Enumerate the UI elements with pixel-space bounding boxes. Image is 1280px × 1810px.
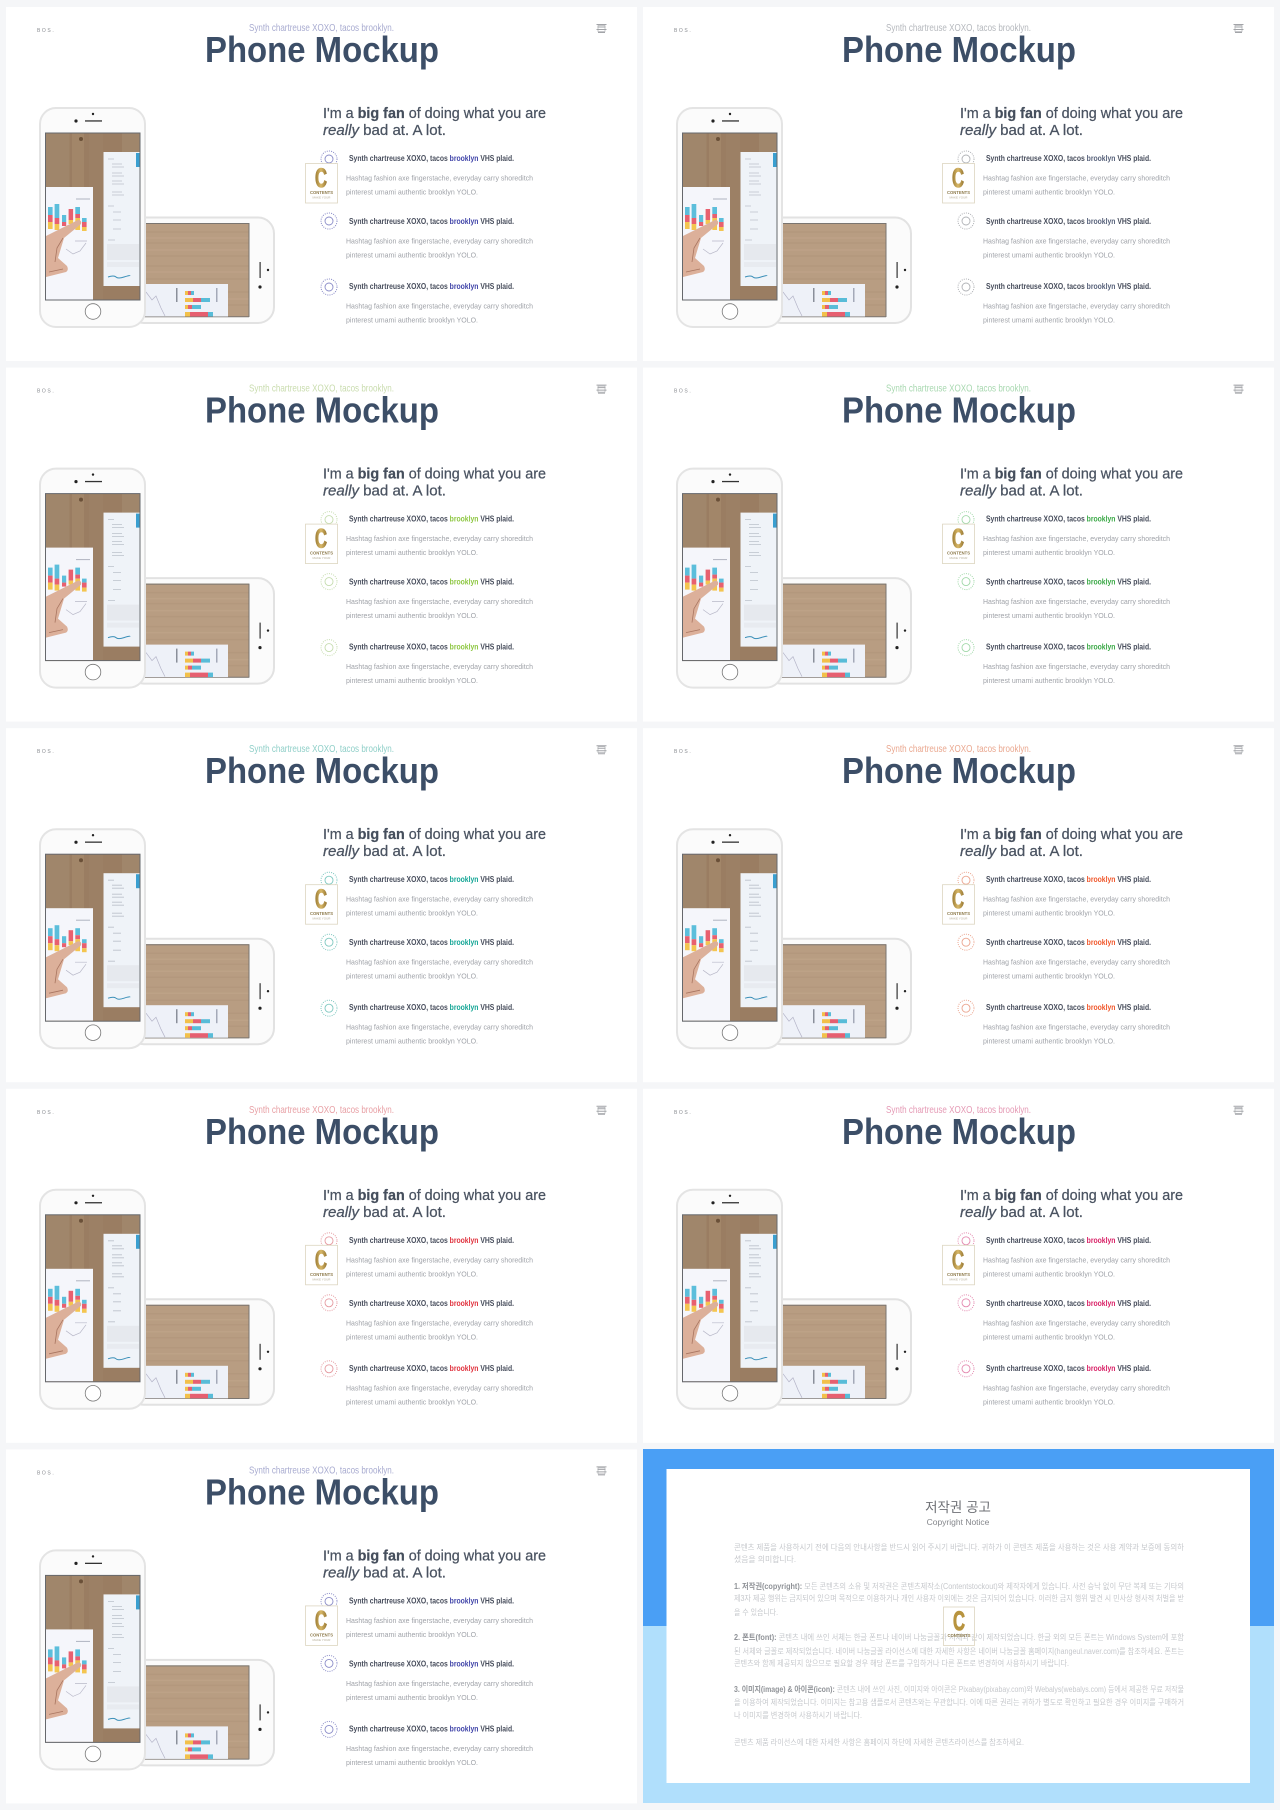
icon: menu [596,24,606,32]
list item 1: pinterest umami authentic brooklyn YOLO. [346,1269,478,1278]
list item 2: pinterest umami authentic brooklyn YOLO. [983,1332,1115,1341]
panel: phone mockup slide 4 [643,368,1274,722]
icon: phones [40,1550,274,1769]
heading [323,105,546,139]
watermark: C [315,524,327,554]
list item 2: pinterest umami authentic brooklyn YOLO. [983,972,1115,981]
watermark: CONTENTS [310,190,333,195]
list item 1: pinterest umami authentic brooklyn YOLO. [346,1630,478,1639]
page tag: BOS. [37,389,55,395]
list item 2: Hashtag fashion axe fingerstache, everyday carry shoreditch [346,1679,533,1688]
list item 2: pinterest umami authentic brooklyn YOLO. [346,972,478,981]
list item 2: Hashtag fashion axe fingerstache, everyday carry shoreditch [983,958,1170,967]
panel: phone mockup slide 8 [643,1089,1274,1443]
title: Phone Mockup [205,29,439,70]
list item 1 [321,1233,533,1278]
page tag: BOS. [674,28,692,34]
list item 3: pinterest umami authentic brooklyn YOLO. [346,1037,478,1046]
list item 2: Synth chartreuse XOXO, tacos brooklyn VHS plaid. [986,578,1151,587]
list item 1: pinterest umami authentic brooklyn YOLO. [346,909,478,918]
list item 3 [321,279,533,324]
watermark: C [952,1245,964,1275]
watermark: C [952,524,964,554]
watermark: MAKE YOUR [950,1277,968,1281]
icon: menu [596,385,606,393]
section 1: copyright: 1. 저작권(copyright): 모든 콘텐츠의 소유 및 저작권은 콘텐츠제작소(Contentstockout)와 제작자에게 있습니다. 사전 승낙 없이 무단 복제 또는 기타의 [734,1581,1184,1591]
list item 3: Synth chartreuse XOXO, tacos brooklyn VHS plaid. [349,282,514,291]
watermark [306,524,338,564]
list item 1: Synth chartreuse XOXO, tacos brooklyn VHS plaid. [349,154,514,163]
page tag: BOS. [37,749,55,755]
watermark: CONTENTS [310,551,333,556]
list item 1 [958,1233,1170,1278]
watermark: MAKE YOUR [950,917,968,921]
list item 2 [321,1295,533,1341]
heading: I'm a big fan of doing what you are [323,466,546,483]
watermark [306,1245,338,1285]
list item 2: Hashtag fashion axe fingerstache, everyday carry shoreditch [983,236,1170,246]
list item 1: pinterest umami authentic brooklyn YOLO. [983,548,1115,557]
icon: phones [40,1190,274,1409]
heading: really bad at. A lot. [960,122,1083,139]
list item 3: pinterest umami authentic brooklyn YOLO. [983,316,1115,324]
icon: phones [40,829,274,1048]
list item 3 [321,640,533,685]
watermark: C [315,1605,327,1635]
watermark [944,1606,974,1646]
list item 1 [321,151,533,196]
title: Phone Mockup [205,1471,439,1512]
watermark: MAKE YOUR [313,196,331,200]
watermark: CONTENTS [947,190,970,195]
list item 3: Synth chartreuse XOXO, tacos brooklyn VHS plaid. [986,1003,1151,1012]
copyright heading: 저작권 공고 [925,1500,991,1515]
section 1: copyright: 제3자 제공 행위는 금지되어 있으며 목적으로 이용하거나 개인 사용자 이외에는 것은 금지되어 있습니다. 이러한 금지 행위 발견 시 민사상 형사적 처벌을 받 [734,1593,1185,1603]
list item 2 [321,1655,533,1702]
list item 1: Hashtag fashion axe fingerstache, everyday carry shoreditch [346,1255,533,1264]
heading [960,105,1183,139]
list item 2: Synth chartreuse XOXO, tacos brooklyn VHS plaid. [986,1299,1151,1308]
icon: menu [1234,24,1244,32]
watermark [306,884,338,924]
list item 2: Synth chartreuse XOXO, tacos brooklyn VHS plaid. [349,578,514,587]
list item 1: pinterest umami authentic brooklyn YOLO. [983,188,1115,196]
list item 3: Synth chartreuse XOXO, tacos brooklyn VHS plaid. [349,643,514,652]
list item 3: Hashtag fashion axe fingerstache, everyday carry shoreditch [346,1383,533,1392]
list item 2: Synth chartreuse XOXO, tacos brooklyn VHS plaid. [349,1299,514,1308]
watermark [306,1605,338,1645]
list item 3: Hashtag fashion axe fingerstache, everyday carry shoreditch [346,1744,533,1753]
watermark [942,1245,974,1285]
list item 3: Synth chartreuse XOXO, tacos brooklyn VHS plaid. [986,282,1151,291]
watermark: CONTENTS [310,1272,333,1277]
watermark: CONTENTS [947,551,970,556]
heading: really bad at. A lot. [323,122,446,139]
icon: phones [677,469,911,688]
list item 3 [321,1000,533,1046]
section 2: font: 콘텐츠와 함께 제공되지 않으므로 필요할 경우 해당 폰트를 구입하거나 다른 폰트로 변경하여 사용하시기 바랍니다. [734,1658,1069,1668]
panel: phone mockup slide 3 [6,368,637,722]
panel: phone mockup slide 9 [6,1449,637,1803]
heading: I'm a big fan of doing what you are [323,1547,546,1564]
panel: phone mockup slide 2 [643,7,1274,361]
list item 2 [958,1295,1170,1341]
icon: menu [1234,746,1244,754]
subtitle: Synth chartreuse XOXO, tacos brooklyn. [249,1104,394,1116]
intro paragraph: 콘텐츠 제품을 사용하시기 전에 다음의 안내사항을 반드시 읽어 주시기 바랍니다. 귀하가 이 콘텐츠 제품을 사용하는 것은 사용 계약과 보증에 동의하 [734,1542,1185,1552]
icon: menu [596,746,606,754]
list item 3: pinterest umami authentic brooklyn YOLO. [346,676,478,685]
list item 1: Synth chartreuse XOXO, tacos brooklyn VHS plaid. [349,1236,514,1245]
list item 1 [958,512,1170,557]
icon: menu [596,1467,606,1475]
list item 2: Hashtag fashion axe fingerstache, everyday carry shoreditch [346,597,533,606]
heading: I'm a big fan of doing what you are [323,105,546,122]
list item 3: pinterest umami authentic brooklyn YOLO. [346,1397,478,1406]
watermark [942,524,974,564]
watermark: MAKE YOUR [313,1277,331,1281]
page tag: BOS. [674,749,692,755]
list item 2: Hashtag fashion axe fingerstache, everyday carry shoreditch [346,958,533,967]
list item 3: pinterest umami authentic brooklyn YOLO. [346,1758,478,1767]
watermark: CONTENTS [947,911,970,916]
list item 1: pinterest umami authentic brooklyn YOLO. [346,548,478,557]
list item 1: Hashtag fashion axe fingerstache, everyday carry shoreditch [346,1616,533,1625]
list item 3: Hashtag fashion axe fingerstache, everyday carry shoreditch [983,662,1170,671]
list item 3: Hashtag fashion axe fingerstache, everyday carry shoreditch [346,302,533,310]
section 3: image and icon [734,1684,1184,1720]
list item 3: Synth chartreuse XOXO, tacos brooklyn VHS plaid. [349,1724,514,1733]
panel: phone mockup slide 5 [6,728,637,1082]
intro paragraph [734,1542,1185,1564]
list item 2 [321,213,533,260]
list item 1: pinterest umami authentic brooklyn YOLO. [983,909,1115,918]
watermark: C [953,1606,965,1636]
icon: menu [596,1106,606,1114]
heading: I'm a big fan of doing what you are [323,826,546,843]
section 3: image and icon: 3. 이미지(image) & 아이콘(icon): 콘텐츠 내에 쓰인 사진, 이미지와 아이콘은 Pixabay(pixabay.com)와 Webalys(webalys.com) 등에서 제공한 무료 저작물 [734,1684,1184,1694]
watermark: CONTENTS [947,1272,970,1277]
watermark: C [315,1245,327,1275]
heading: I'm a big fan of doing what you are [960,105,1183,122]
list item 1: Synth chartreuse XOXO, tacos brooklyn VHS plaid. [986,1236,1151,1245]
list item 2: Synth chartreuse XOXO, tacos brooklyn VHS plaid. [986,217,1151,226]
list item 3: Hashtag fashion axe fingerstache, everyday carry shoreditch [346,662,533,671]
list item 1: Hashtag fashion axe fingerstache, everyday carry shoreditch [983,895,1170,904]
watermark: C [315,884,327,914]
watermark: MAKE YOUR [950,556,968,560]
panel: phone mockup slide 6 [643,728,1274,1082]
subtitle: Synth chartreuse XOXO, tacos brooklyn. [886,383,1031,395]
list item 2: pinterest umami authentic brooklyn YOLO. [346,611,478,620]
list item 2: Hashtag fashion axe fingerstache, everyday carry shoreditch [346,1318,533,1327]
intro paragraph: 셨음을 의미합니다. [734,1554,796,1564]
section 3: image and icon: 나 이미지를 변경하여 사용하시기 바랍니다. [734,1710,862,1720]
list item 2: pinterest umami authentic brooklyn YOLO. [983,250,1115,260]
list item 3 [321,1361,533,1406]
list item 1: Hashtag fashion axe fingerstache, everyday carry shoreditch [983,174,1170,182]
heading [323,1187,546,1221]
subtitle: Synth chartreuse XOXO, tacos brooklyn. [249,22,394,34]
list item 1 [958,872,1170,918]
list item 3: Hashtag fashion axe fingerstache, everyday carry shoreditch [983,1023,1170,1032]
title: Phone Mockup [205,750,439,791]
list item 2 [321,574,533,620]
heading [323,466,546,500]
watermark: MAKE YOUR [313,556,331,560]
section 2: font: 된 서체와 글꼴로 제작되었습니다. 네이버 나눔글꼴 라이선스에 대한 자세한 사항은 네이버 나눔글꼴 홈페이지(hangeul.naver.com)를 참조하세요. 폰트는 [734,1646,1184,1656]
heading [960,1187,1183,1221]
list item 3 [958,1361,1170,1406]
list item 3: pinterest umami authentic brooklyn YOLO. [983,1037,1115,1046]
list item 1: Synth chartreuse XOXO, tacos brooklyn VHS plaid. [349,515,514,524]
watermark: CONTENTS [947,1633,971,1638]
icon: menu [1234,385,1244,393]
page tag: BOS. [674,389,692,395]
list item 3: Hashtag fashion axe fingerstache, everyday carry shoreditch [983,302,1170,310]
heading [960,466,1183,500]
closing line: 콘텐츠 제품 라이선스에 대한 자세한 사항은 홈페이지 하단에 자세한 콘텐츠라이선스를 참조하세요. [734,1737,1024,1747]
list item 2 [321,934,533,981]
icon: phones [677,108,911,327]
list item 1: Hashtag fashion axe fingerstache, everyday carry shoreditch [346,534,533,543]
subtitle: Synth chartreuse XOXO, tacos brooklyn. [886,743,1031,755]
list item 1: Synth chartreuse XOXO, tacos brooklyn VHS plaid. [986,515,1151,524]
panel: phone mockup slide 7 [6,1089,637,1443]
page tag: BOS. [37,28,55,34]
section 1: copyright [734,1581,1185,1617]
list item 1: Synth chartreuse XOXO, tacos brooklyn VHS plaid. [986,154,1151,163]
heading: I'm a big fan of doing what you are [960,826,1183,843]
list item 2: pinterest umami authentic brooklyn YOLO. [346,1332,478,1341]
watermark [942,163,974,203]
list item 2: Hashtag fashion axe fingerstache, everyday carry shoreditch [346,236,533,246]
list item 1: Synth chartreuse XOXO, tacos brooklyn VHS plaid. [349,1596,514,1605]
watermark: C [952,884,964,914]
list item 1: pinterest umami authentic brooklyn YOLO. [983,1269,1115,1278]
list item 1 [321,512,533,557]
watermark: CONTENTS [310,1632,333,1637]
page tag: BOS. [37,1110,55,1116]
list item 1: Synth chartreuse XOXO, tacos brooklyn VHS plaid. [986,875,1151,884]
heading: really bad at. A lot. [960,1204,1083,1221]
subtitle: Synth chartreuse XOXO, tacos brooklyn. [886,1104,1031,1116]
list item 1: Synth chartreuse XOXO, tacos brooklyn VHS plaid. [349,875,514,884]
section 2: font: 2. 폰트(font): 콘텐츠 내에 쓰인 서체는 한글 폰트나 네이버 나눔글꼴과 서체와 같이 제작되었습니다. 한글 외의 모든 폰트는 Windows System에 포함 [734,1632,1185,1642]
section 2: font [734,1632,1185,1668]
title: Phone Mockup [842,29,1076,70]
list item 3: Synth chartreuse XOXO, tacos brooklyn VHS plaid. [349,1003,514,1012]
list item 1: Hashtag fashion axe fingerstache, everyday carry shoreditch [983,534,1170,543]
heading [960,826,1183,860]
list item 3: pinterest umami authentic brooklyn YOLO. [983,1397,1115,1406]
page tag: BOS. [37,1470,55,1476]
title: Phone Mockup [205,1111,439,1152]
page tag: BOS. [674,1110,692,1116]
list item 2: Hashtag fashion axe fingerstache, everyday carry shoreditch [983,597,1170,606]
list item 2: Hashtag fashion axe fingerstache, everyday carry shoreditch [983,1318,1170,1327]
heading [323,1547,546,1581]
watermark: MAKE YOUR [313,1638,331,1642]
heading: really bad at. A lot. [323,483,446,500]
watermark: MAKE YOUR [950,196,968,200]
watermark [306,163,338,203]
watermark [942,884,974,924]
watermark: MAKE YOUR [313,917,331,921]
heading: I'm a big fan of doing what you are [960,1187,1183,1204]
watermark: C [952,163,964,193]
list item 1: pinterest umami authentic brooklyn YOLO. [346,188,478,196]
list item 3: Hashtag fashion axe fingerstache, everyday carry shoreditch [346,1023,533,1032]
copyright subheading: Copyright Notice [927,1517,990,1527]
list item 2 [958,934,1170,981]
heading: really bad at. A lot. [323,843,446,860]
heading: really bad at. A lot. [323,1564,446,1581]
list item 2 [958,213,1170,260]
list item 2 [958,574,1170,620]
list item 3: Synth chartreuse XOXO, tacos brooklyn VHS plaid. [349,1364,514,1373]
heading: I'm a big fan of doing what you are [323,1187,546,1204]
section 1: copyright: 을 수 있습니다. [734,1607,778,1617]
heading: really bad at. A lot. [960,483,1083,500]
list item 1 [958,151,1170,196]
list item 1: Hashtag fashion axe fingerstache, everyday carry shoreditch [346,895,533,904]
icon: phones [40,108,274,327]
watermark: CONTENTS [310,911,333,916]
subtitle: Synth chartreuse XOXO, tacos brooklyn. [249,743,394,755]
list item 3 [958,1000,1170,1046]
title: Phone Mockup [842,390,1076,431]
list item 3 [958,279,1170,324]
list item 1 [321,872,533,918]
list item 3: Synth chartreuse XOXO, tacos brooklyn VHS plaid. [986,1364,1151,1373]
title: Phone Mockup [842,1111,1076,1152]
watermark: C [315,163,327,193]
heading [323,826,546,860]
subtitle: Synth chartreuse XOXO, tacos brooklyn. [886,22,1031,34]
icon: menu [1234,1106,1244,1114]
heading: really bad at. A lot. [960,843,1083,860]
list item 3 [321,1721,533,1767]
list item 3: pinterest umami authentic brooklyn YOLO. [346,316,478,324]
list item 3: Synth chartreuse XOXO, tacos brooklyn VHS plaid. [986,643,1151,652]
list item 2: pinterest umami authentic brooklyn YOLO. [346,1693,478,1702]
list item 2: pinterest umami authentic brooklyn YOLO. [346,250,478,260]
list item 1: Hashtag fashion axe fingerstache, everyday carry shoreditch [983,1255,1170,1264]
list item 2: Synth chartreuse XOXO, tacos brooklyn VHS plaid. [349,938,514,947]
list item 3: Hashtag fashion axe fingerstache, everyday carry shoreditch [983,1383,1170,1392]
list item 2: Synth chartreuse XOXO, tacos brooklyn VHS plaid. [349,1659,514,1668]
icon: phones [677,1190,911,1409]
list item 2: Synth chartreuse XOXO, tacos brooklyn VHS plaid. [986,938,1151,947]
icon: phones [677,829,911,1048]
panel: copyright notice [643,1449,1274,1803]
section 3: image and icon: 을 이용하여 제작되었습니다. 이미지는 참고용 샘플로서 콘텐츠와는 무관합니다. 이에 따른 권리는 귀하가 별도로 확인하고 필요한 경우 이미지를 구매하거 [734,1697,1184,1707]
title: Phone Mockup [842,750,1076,791]
heading: really bad at. A lot. [323,1204,446,1221]
list item 3: pinterest umami authentic brooklyn YOLO. [983,676,1115,685]
icon: phones [40,469,274,688]
subtitle: Synth chartreuse XOXO, tacos brooklyn. [249,383,394,395]
list item 2: pinterest umami authentic brooklyn YOLO. [983,611,1115,620]
title: Phone Mockup [205,390,439,431]
list item 2: Synth chartreuse XOXO, tacos brooklyn VHS plaid. [349,217,514,226]
subtitle: Synth chartreuse XOXO, tacos brooklyn. [249,1464,394,1476]
list item 1: Hashtag fashion axe fingerstache, everyday carry shoreditch [346,174,533,182]
list item 1 [321,1593,533,1639]
heading: I'm a big fan of doing what you are [960,466,1183,483]
list item 3 [958,640,1170,685]
panel: phone mockup slide 1 [6,7,637,361]
